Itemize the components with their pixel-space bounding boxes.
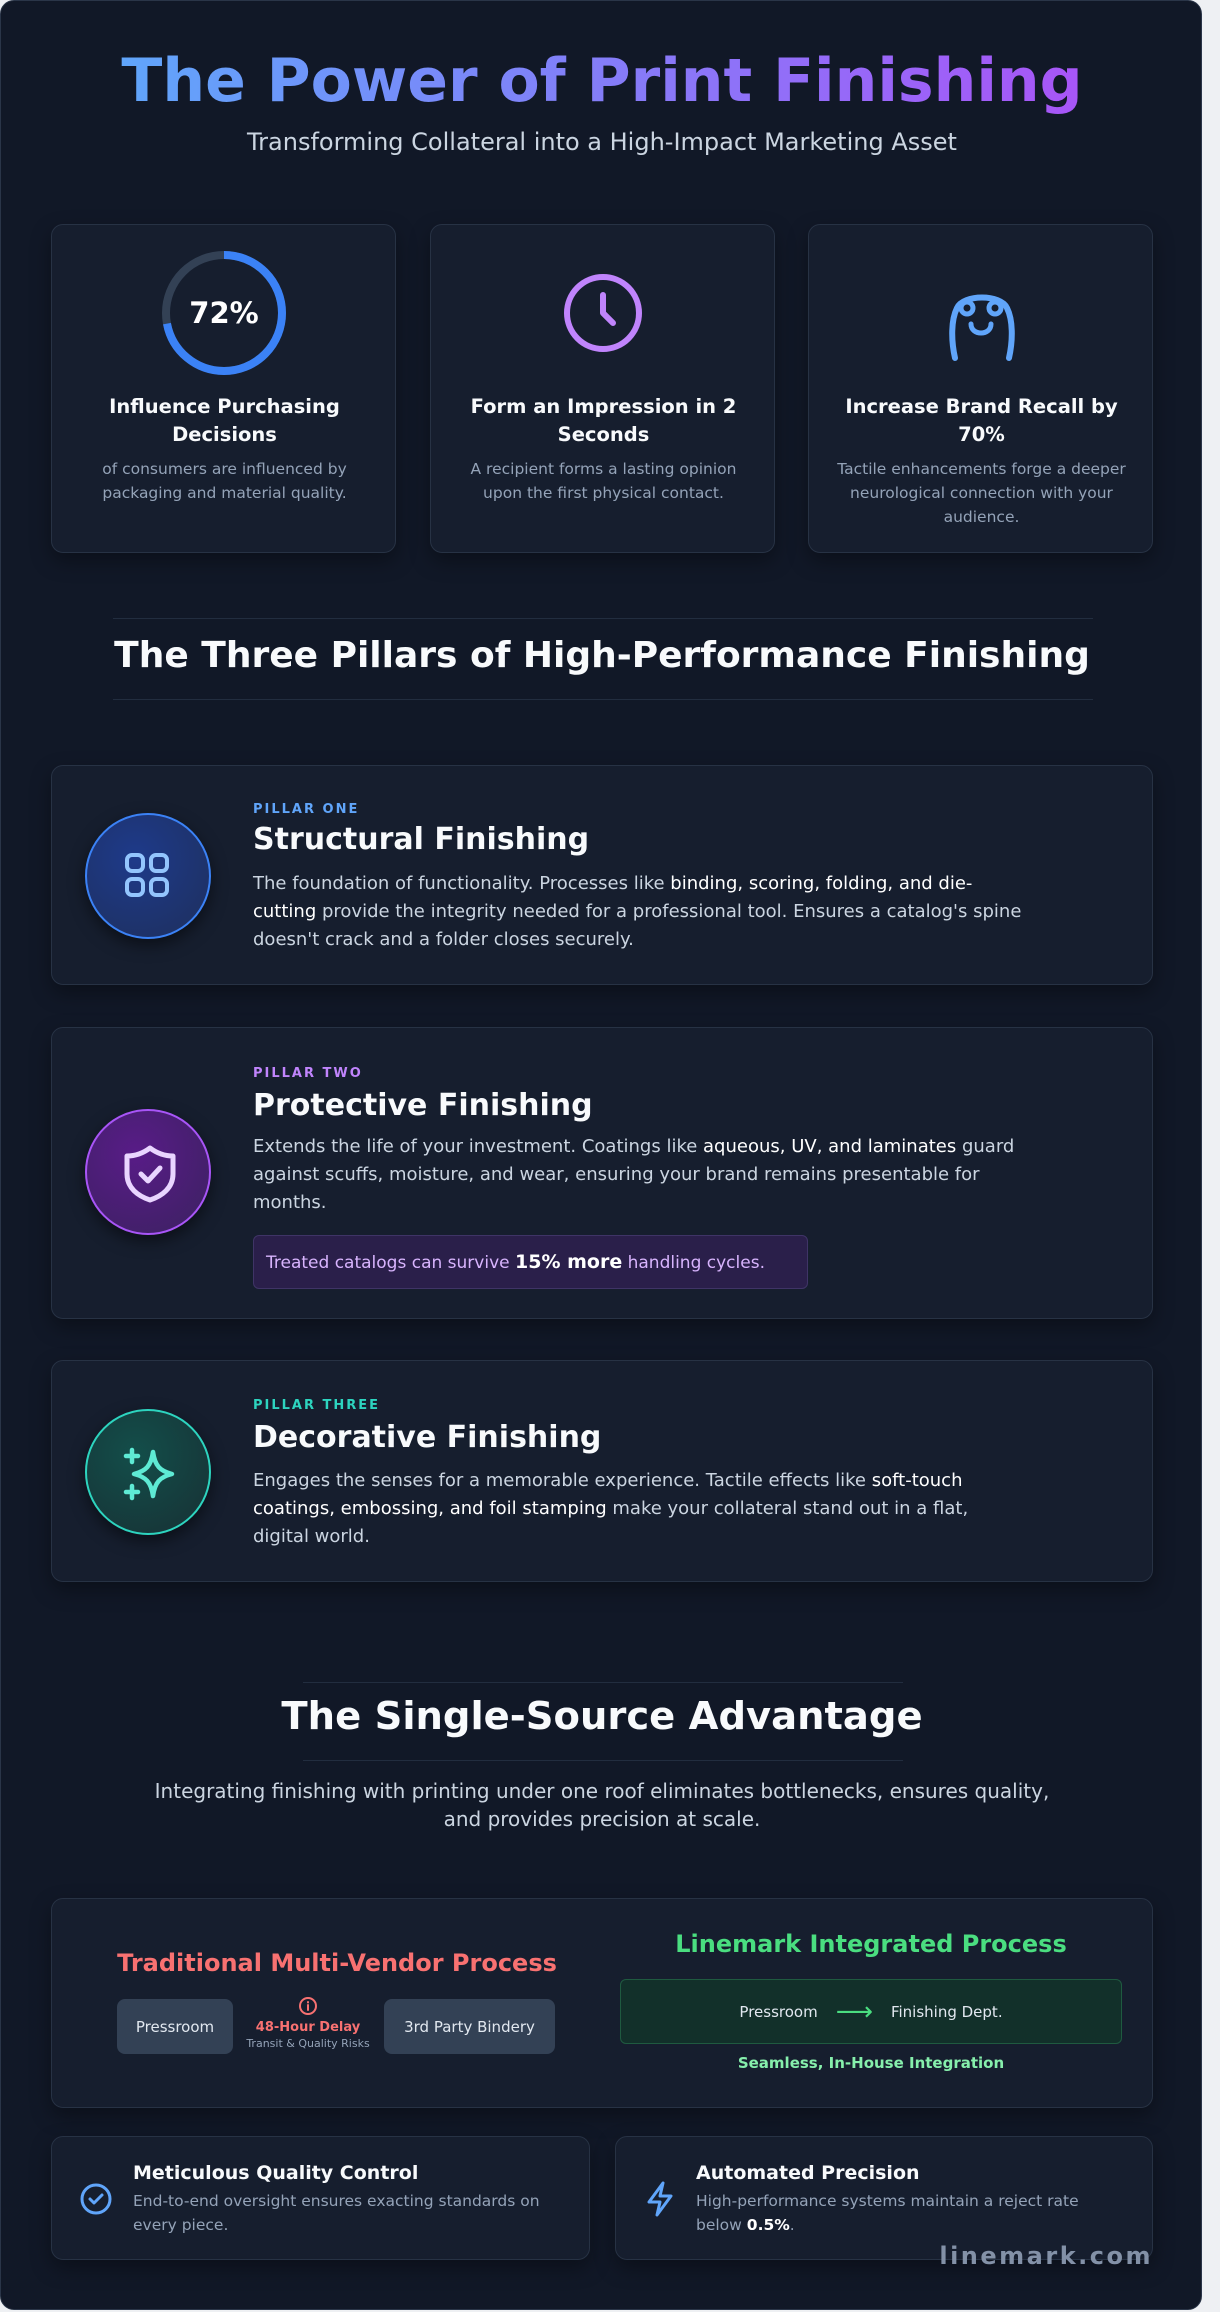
pillar body: Engages the senses for a memorable experience. Tactile effects like soft-touch coatings, embossing, and foil stamping make your collateral stand out in a flat, digital world.: [253, 1470, 968, 1547]
integrated flow box: Pressroom: [739, 2002, 818, 2020]
integrated flow box: [620, 1979, 1122, 2044]
pillar title: Structural Finishing: [253, 822, 589, 857]
integrated flow box: ⟶: [836, 1996, 873, 2026]
section intro text: Integrating finishing with printing under one roof eliminates bottlenecks, ensures quality, and provides precision at scale.: [155, 1779, 1049, 1831]
pillar label: PILLAR THREE: [253, 1398, 380, 1413]
traditional process title: Traditional Multi-Vendor Process: [117, 1949, 557, 1977]
icon: clock: [564, 274, 642, 352]
delay warning: 48-Hour Delay: [256, 2020, 360, 2035]
subtitle: Transforming Collateral into a High-Impact Marketing Asset: [247, 128, 957, 156]
icon: check circle: [80, 2184, 112, 2214]
stat description: of consumers are influenced by packaging and material quality.: [102, 460, 347, 502]
card text: End-to-end oversight ensures exacting standards on every piece.: [133, 2192, 540, 2234]
card text: High-performance systems maintain a reject rate below 0.5%.: [696, 2192, 1079, 2234]
pillar label: PILLAR ONE: [253, 802, 359, 817]
card title: Meticulous Quality Control: [133, 2162, 418, 2184]
pillar label: PILLAR TWO: [253, 1066, 363, 1081]
card: quality control: [51, 2136, 590, 2260]
panel: pillar two: [51, 1027, 1153, 1319]
pillar body: The foundation of functionality. Processes like binding, scoring, folding, and die-cutting provide the integrity needed for a professional tool. Ensures a catalog's spine doesn't crack and a folder closes securely.: [253, 873, 1021, 950]
stat title: Increase Brand Recall by 70%: [845, 395, 1118, 446]
donut chart 72%: 72%: [189, 296, 259, 330]
icon: lightning: [647, 2182, 673, 2216]
panel: process comparison: [51, 1898, 1153, 2108]
heading: single-source: The Single-Source Advantage: [281, 1694, 923, 1739]
donut chart 72%: [162, 251, 286, 375]
card title: Automated Precision: [696, 2162, 920, 2184]
stat card 2: [430, 224, 775, 553]
delay warning: [246, 1997, 370, 2050]
pillar title: Decorative Finishing: [253, 1420, 601, 1455]
pillar body: Extends the life of your investment. Coatings like aqueous, UV, and laminates guard against scuffs, moisture, and wear, ensuring your brand remains presentable for months.: [253, 1136, 1014, 1213]
heading: three pillars: The Three Pillars of High-Performance Finishing: [114, 635, 1090, 676]
stat card 1: [51, 224, 396, 553]
panel: pillar three: [51, 1360, 1153, 1582]
title: The Power of Print Finishing: [121, 46, 1083, 116]
stat card 3: [808, 224, 1153, 553]
callout: 15% more: Treated catalogs can survive 15% more handling cycles.: [266, 1251, 765, 1273]
callout: 15% more: [253, 1235, 808, 1289]
chip: pressroom: [117, 1999, 233, 2054]
icon: brain/recall: [949, 294, 1015, 361]
chip: 3rd party bindery: 3rd Party Bindery: [404, 2018, 535, 2036]
icon: shield: [85, 1109, 211, 1235]
integration caption: Seamless, In-House Integration: [738, 2054, 1004, 2072]
stat title: Influence Purchasing Decisions: [109, 395, 340, 446]
chip: pressroom: Pressroom: [136, 2018, 214, 2036]
delay warning: Transit & Quality Risks: [246, 2037, 370, 2050]
stat title: Form an Impression in 2 Seconds: [471, 395, 736, 446]
integrated flow box: Finishing Dept.: [891, 2002, 1003, 2020]
icon: grid: [85, 813, 211, 939]
stat description: A recipient forms a lasting opinion upon the first physical contact.: [471, 460, 736, 502]
pillar title: Protective Finishing: [253, 1088, 593, 1123]
card: automated precision: [615, 2136, 1153, 2260]
integrated process title: Linemark Integrated Process: [675, 1930, 1067, 1958]
brand watermark: linemark.com: [939, 2242, 1153, 2270]
stat description: Tactile enhancements forge a deeper neurological connection with your audience.: [837, 460, 1126, 526]
panel: pillar one: [51, 765, 1153, 985]
icon: sparkles: [85, 1409, 211, 1535]
chip: 3rd party bindery: [384, 1999, 555, 2054]
